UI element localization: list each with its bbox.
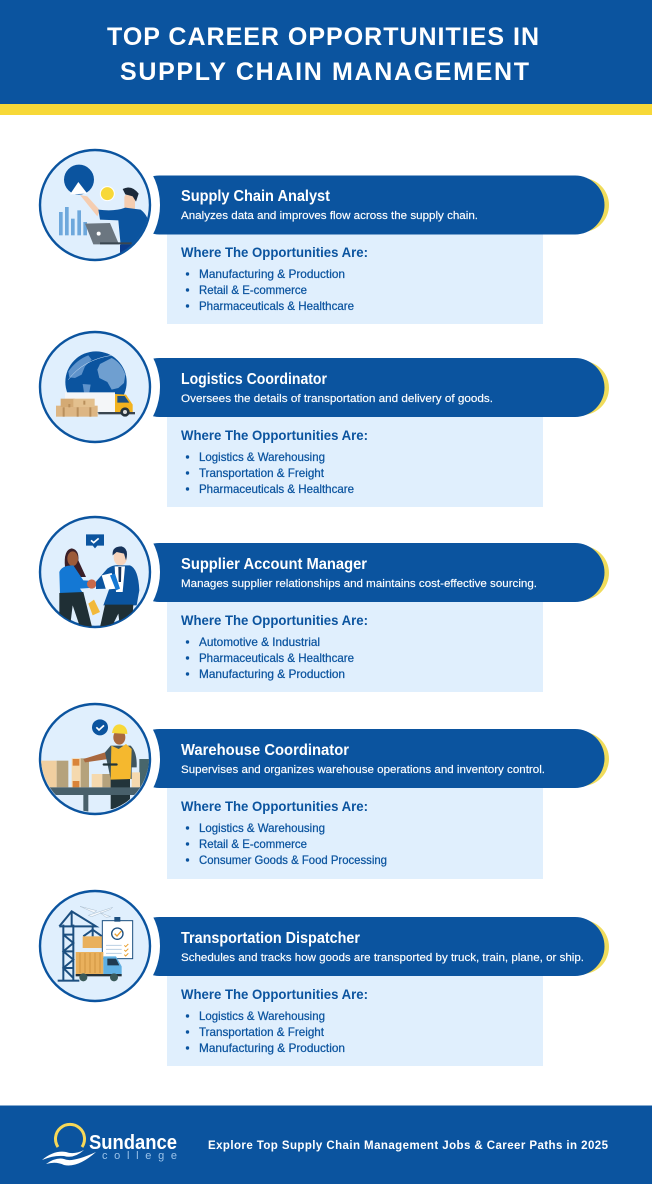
header banner: SUPPLY CHAIN MANAGEMENT — [120, 58, 529, 86]
logo: Sundance College — [42, 1124, 177, 1165]
opportunities box: Logistics & Warehousing — [199, 450, 325, 464]
opportunities box: Logistics & Warehousing — [199, 1009, 325, 1023]
icon: crane, truck, plane and checklist — [40, 891, 150, 1001]
header banner — [0, 0, 652, 115]
opportunities box: Where The Opportunities Are: — [181, 612, 368, 628]
role banner: Manages supplier relationships and maintains cost-effective sourcing. — [181, 578, 537, 590]
opportunities box: Transportation & Freight — [199, 466, 325, 480]
opportunities box — [167, 602, 543, 692]
logo: Sundance College: college — [102, 1150, 177, 1162]
role banner: Analyzes data and improves flow across the supply chain. — [181, 210, 478, 222]
opportunities box: Pharmaceuticals & Healthcare — [199, 482, 354, 496]
opportunities box: Logistics & Warehousing — [199, 821, 325, 835]
opportunities box — [167, 788, 543, 879]
role banner: Logistics Coordinator — [181, 371, 327, 388]
opportunities box: Consumer Goods & Food Processing — [199, 853, 387, 867]
footer banner — [0, 1106, 652, 1184]
opportunities box: Retail & E-commerce — [199, 837, 307, 851]
opportunities box: Pharmaceuticals & Healthcare — [199, 651, 354, 665]
role banner: Supplier Account Manager — [181, 556, 367, 573]
panel: Warehouse Coordinator — [30, 694, 609, 879]
opportunities box: Manufacturing & Production — [199, 267, 345, 281]
logo: Sundance College: Sundance — [89, 1132, 177, 1154]
opportunities box: Automotive & Industrial — [199, 635, 320, 649]
role banner — [30, 507, 609, 637]
role banner — [30, 322, 609, 452]
opportunities box: Where The Opportunities Are: — [181, 986, 368, 1002]
icon: warehouse worker at conveyor — [40, 704, 150, 814]
panel: Logistics Coordinator — [30, 322, 609, 507]
opportunities box: Where The Opportunities Are: — [181, 798, 368, 814]
opportunities box: Pharmaceuticals & Healthcare — [199, 299, 354, 313]
opportunities box: Where The Opportunities Are: — [181, 427, 368, 443]
icon: analyst with charts and laptop — [40, 150, 150, 260]
header banner: TOP CAREER OPPORTUNITIES IN — [107, 23, 539, 51]
opportunities box: Transportation & Freight — [199, 1025, 325, 1039]
opportunities box — [167, 976, 543, 1066]
opportunities box: Retail & E-commerce — [199, 283, 307, 297]
opportunities box — [167, 417, 543, 507]
role banner — [30, 881, 609, 1011]
role banner: Supervises and organizes warehouse operations and inventory control. — [181, 764, 545, 776]
opportunities box — [167, 234, 543, 324]
role banner: Warehouse Coordinator — [181, 742, 349, 759]
role banner: Schedules and tracks how goods are transported by truck, train, plane, or ship. — [181, 952, 584, 964]
opportunities box: Manufacturing & Production — [199, 1041, 345, 1055]
icon: globe, truck and boxes — [40, 332, 150, 442]
role banner: Oversees the details of transportation and delivery of goods. — [181, 393, 493, 405]
panel: Supply Chain Analyst — [30, 140, 609, 324]
role banner: Supply Chain Analyst — [181, 188, 330, 205]
opportunities box: Where The Opportunities Are: — [181, 244, 368, 260]
role banner — [30, 694, 609, 824]
role banner — [30, 140, 609, 270]
role banner: Transportation Dispatcher — [181, 930, 360, 947]
panel: Transportation Dispatcher — [30, 881, 609, 1066]
footer call to action: Explore Top Supply Chain Management Jobs & Career Paths in 2025 — [208, 1140, 609, 1152]
icon: two people shaking hands — [40, 517, 150, 627]
opportunities box: Manufacturing & Production — [199, 667, 345, 681]
panel: Supplier Account Manager — [30, 507, 609, 692]
